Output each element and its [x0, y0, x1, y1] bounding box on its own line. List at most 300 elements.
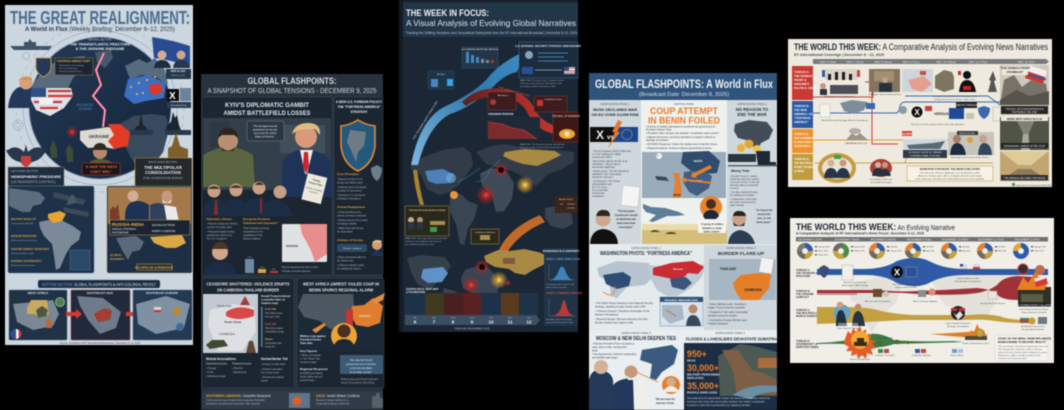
panel: Southern Lebanon and Gaza strip: GAZA: Israeli Strikes Continue	[316, 394, 360, 398]
panel: West Africa: WEST AFRICA	[28, 291, 49, 295]
box: multipolar world forum	[405, 206, 449, 236]
panel: Fortress America strategy: • Middle East and Iran are	[337, 227, 364, 230]
header panel: THE WEEK IN FOCUS:	[406, 8, 489, 19]
timeline: 6:10 AM:	[265, 307, 277, 311]
box: story of the week: narrative of a fracturing order.	[998, 357, 1027, 360]
title: THE GREAT REALIGNMENT:	[10, 8, 190, 28]
panel: Coup attempt in Benin: CENTRAL PANEL	[674, 103, 695, 106]
box: story of the week: The week began with Ukraine diplomacy and a new	[998, 345, 1048, 348]
box: multipolar world forum: THE MULTIPOLAR WORLD FORUM	[409, 209, 446, 212]
map: Donbas: BORODIN	[286, 245, 298, 248]
thread labels	[796, 268, 824, 349]
quote box: of our dear country."	[350, 371, 372, 374]
map: NIGERIA	[691, 179, 703, 183]
timeline label: US thread: THREAD B:	[794, 104, 809, 108]
panel: Musk declares war: • Elon Musk calls for the EU to be	[592, 160, 628, 163]
thread labels: THREAD A:	[796, 268, 810, 272]
markers	[878, 341, 882, 345]
donut legends: Other 10%	[1034, 250, 1044, 252]
panel: Kyiv's diplomatic gambit: Recent assessments show a slow	[282, 266, 318, 269]
text: military coup: Talon fails	[300, 341, 313, 345]
text: Zelensky's stance: as part of a peace deal.	[207, 226, 232, 229]
scene: press and diplomats	[948, 131, 994, 159]
caption	[932, 95, 978, 101]
figure: Zelensky	[203, 128, 255, 187]
timeline label: US thread: "FORTRESS	[794, 116, 811, 120]
box: story of the week: MANEUVERING TO MILITARY REALITY	[998, 340, 1046, 344]
donut: Dec 12	[1016, 246, 1026, 256]
timeline bar: DEC 9 (Tue)	[903, 60, 919, 64]
panel: Sumatra floods: 30,000+	[687, 363, 719, 373]
timeline: Thai forces attack	[265, 327, 284, 330]
icon: fighter jet	[643, 204, 685, 222]
donut legends: Asia 20%	[926, 250, 935, 252]
panel: divergence charts: fades as the coup fails.	[546, 286, 568, 289]
text: European position: European Position:	[243, 217, 271, 221]
photo: Donbas ruins: CRUMBLES"	[1006, 70, 1024, 74]
text: humanitarian toll: • Civilians evacuated	[261, 368, 283, 371]
map: Ukraine: UKRAINE	[89, 134, 109, 139]
text: military coup: remains at large	[300, 361, 317, 364]
EU flag and leaders: NEW ALLIES	[171, 70, 186, 73]
icon: explosion	[844, 326, 877, 359]
icon: Ukraine silhouette and coins	[734, 120, 773, 153]
panel: No reason to end the war: "so much money" in the war	[730, 181, 760, 184]
flow: red conflict stream	[462, 85, 566, 142]
figure: Putin and Modi	[589, 360, 646, 410]
thread labels: WORLD NARRATIVE	[796, 314, 822, 318]
panel: hemispheric pressure map: WARNED SOVEREIGNTY	[11, 259, 42, 263]
panel: Washington pivots: • Russia & Europe: Moscow welcomes the shift,	[595, 318, 648, 321]
panel: Musk declares war: of American	[592, 192, 605, 195]
timeline bar: DECEMBER 12 (FRI)	[1015, 237, 1040, 241]
timeline days: THU	[527, 318, 532, 320]
panel: Sumatra floods: Torrential rains hit catastrophic impact: the floods and landslides caused by	[687, 397, 771, 400]
panel: Border flare-up: • Heavy fighting erupts, breaking a	[708, 303, 747, 306]
panel: left section label: HEMISPHERIC PRESSURE	[11, 174, 61, 179]
timeline days	[405, 315, 540, 330]
timeline days: 6	[414, 320, 417, 326]
donut legends: Sudan 25%	[854, 250, 865, 252]
timeline label: US thread	[792, 101, 813, 128]
panel: Southern Lebanon and Gaza strip	[202, 391, 383, 409]
figure: Musk: "The European	[617, 210, 635, 213]
panel: Border flare-up: BORDER FLARE-UP	[718, 251, 765, 257]
panel: West Africa unrest: Reflects deep anti-French sentiment	[341, 378, 378, 381]
panel: Coup attempt in Benin: President Patrice Talon.	[646, 128, 673, 132]
bar chart: 8%	[272, 269, 276, 271]
panel: Sumatra floods	[684, 331, 777, 410]
flow lines	[813, 82, 1002, 163]
timeline label: multipolar thread: & INDIA	[794, 169, 804, 173]
panel: Russia-India partnership: PARTNERSHIP	[112, 232, 129, 234]
timeline label: Caribbean thread	[792, 129, 815, 153]
header: (Broadcast Date: December 8, 2025)	[639, 92, 729, 98]
icon: book	[873, 289, 882, 297]
stream: green with explosion: Gaza: Strikes	[950, 354, 964, 357]
timeline band columns: & FOUNDATION	[406, 291, 425, 294]
donut: Dec 7	[836, 246, 846, 256]
panel: Moscow and New Delhi: • Russian President Putin concludes a	[592, 342, 635, 346]
box: story of the week: STORY OF THE WEEK: FROM DIPLOMATIC	[998, 336, 1051, 340]
box: national security strategy	[515, 42, 581, 78]
panel: Coup attempt in Benin: • Nigeria Intervenes: Launches airstrikes on targets in Benin to	[646, 136, 716, 139]
panel: Moscow and New Delhi: MOSCOW & NEW DELHI DEEPEN TIES	[596, 336, 677, 342]
panel: Sumatra floods: SURROUNDING PANEL 6	[715, 332, 745, 335]
panel: hemispheric pressure map: MEDIUM PRESSURE	[11, 234, 37, 238]
box: story of the week	[995, 335, 1051, 361]
panel: Moscow and New Delhi: SURROUNDING PANEL 5	[621, 332, 651, 335]
panel: No reason to end the war	[727, 100, 777, 244]
text: Zelensky's stance: the U.S. Congress.	[207, 238, 228, 240]
timeline label: Caribbean thread: VENEZUELA	[794, 144, 811, 148]
text: analysis	[520, 79, 565, 149]
thread labels: THE TRANSATLANTIC	[796, 271, 824, 275]
text: military coup: ground troops.	[300, 379, 315, 382]
timeline bar: DECEMBER 7 (SUN)	[835, 237, 860, 241]
panel: Fortress America strategy: de-emphasized	[337, 232, 353, 234]
panel: Washington pivots: Europe rebuked and urged to shift.	[595, 322, 634, 324]
panel: hemispheric pressure map: Regional warning raised	[11, 264, 35, 267]
figure: Donald Trump Jr.: "As long as the	[756, 209, 773, 212]
donut legends: US 30%	[998, 246, 1006, 248]
map: THAILAND	[217, 304, 232, 308]
timeline label: US thread: AMERICA"	[794, 120, 809, 124]
timeline: shadow erupt.	[261, 301, 279, 305]
panel: Sumatra floods: monsoon rains have left communities isolated; the military is deployed	[687, 400, 765, 404]
stream: green with explosion: Benin Coup Attempt	[850, 358, 870, 361]
scene: Dec 6-7 meeting	[820, 69, 860, 98]
figure: Musk: Commission should	[615, 214, 638, 217]
panel: divergence charts: DIVERGENCE IN FLASHPOINTS	[543, 250, 580, 253]
timeline bar: DEC 8 (Mon)	[874, 60, 892, 64]
timeline days: 12	[526, 320, 532, 326]
icon: X vs EU	[590, 120, 638, 148]
panel: Fortress America strategy: "Europe is going to	[343, 247, 362, 250]
thread labels: THE UKRAINE	[796, 292, 814, 296]
panel: Fortress America strategy: • Blames European allies for	[337, 256, 366, 259]
stream: gold: Resigns Amid Protests	[1022, 328, 1045, 331]
text: European position: Western alliance.	[243, 238, 262, 240]
text: analysis: ANALYSIS: The Ukraine narrative turned from	[520, 143, 565, 146]
panel: right section label: CONSOLIDATION	[145, 170, 181, 175]
panel: Kyiv's diplomatic gambit	[202, 97, 332, 275]
text: Zelensky's stance: • Requests legally binding	[207, 230, 235, 234]
photo: city street	[1000, 117, 1049, 150]
donut legends: War 20%	[998, 250, 1007, 252]
landslide scene	[718, 344, 777, 399]
panel: Fortress America strategy: of strategic stability	[337, 222, 357, 226]
label box: DOMESTIC PRESSURE	[954, 105, 980, 107]
text: military coup: • Mutiny commander	[300, 354, 321, 357]
text: military coup: Lt. Col. Pascal Tigri	[300, 358, 320, 360]
box: Southeast Asia: Border Clash	[559, 199, 574, 201]
scene: naval	[902, 131, 947, 158]
panel: Sumatra floods: MILITARY PERSONNEL	[687, 372, 720, 376]
icon: X logo and label: Escalating Fines	[171, 104, 188, 107]
panel: Border flare-up	[704, 245, 777, 330]
timeline: from gun ruins.	[265, 316, 281, 318]
panel: West Africa unrest: BENIN SPARKS REGIONAL ALARM	[309, 288, 373, 292]
icon: peace plan document	[301, 173, 327, 204]
text: humanitarian toll: • Schools and markets	[261, 376, 285, 379]
panel: Washington pivots: • The White House releases a new National Security	[595, 302, 654, 305]
figure: Trump	[282, 123, 332, 197]
red event boxes: Conflicting Claims	[544, 98, 563, 101]
flow: red conflict stream: THE UKRAINE THEATRE	[498, 85, 530, 98]
text: humanitarian toll	[261, 357, 288, 382]
volcano icon: CARIBBEAN BUILDUP	[845, 142, 868, 145]
donut legends: Other 15%	[818, 254, 828, 256]
panel: Washington pivots: Western Hemisphere.	[595, 314, 619, 316]
icon: peace plan document: & territory	[309, 190, 318, 195]
panel: Kyiv's diplomatic gambit: KYIV'S DIPLOMATIC GAMBIT	[225, 102, 309, 109]
panel: Cambodia-Thailand ceasefire: ON CAMBODIA-THAILAND BORDER	[217, 288, 280, 292]
savanna strip: "A group of soldiers	[701, 223, 724, 226]
panel: Fortress America strategy: • Russia viewed in the context	[337, 219, 368, 222]
timeline label: multipolar thread: THE MULTIPOLAR	[794, 162, 815, 165]
text: Zelensky's stance	[206, 217, 238, 240]
icon: aircraft carrier	[10, 39, 52, 50]
panel: No reason to end the war: NO REASON TO	[736, 107, 769, 112]
panel: Washington pivots: • "Fortress America": Prioritizes domination of the	[595, 310, 650, 313]
quote bubble: States of America."	[255, 136, 275, 138]
box: national security strategy: U.S. NATIONAL SECURITY STRATEGY BREAKDOWN	[515, 44, 581, 48]
thread labels: THE MULTIPOLAR	[796, 311, 819, 315]
stream: green with explosion	[817, 326, 964, 361]
caption: Corruption scandal threatens Zelensky's circle;	[932, 95, 978, 98]
stream: gold: Indian Parallel Parliament	[946, 322, 971, 325]
panel: Musk declares war: ON EU OVER €120M FINE	[591, 112, 639, 117]
EU flag and leaders: Diplomatic Rifts	[171, 74, 185, 77]
text: humanitarian toll: from border areas	[261, 372, 280, 374]
box: December 10 event: Conference Moscow	[475, 231, 495, 234]
panel: Border flare-up: SURROUNDING PANEL 4	[726, 247, 756, 250]
text: military coup: deploy fighter jets and	[300, 376, 323, 378]
icon: handshake circle	[951, 306, 965, 320]
narrative synthesis box: NARRATIVE SYNTHESIS: THE WEEK'S BIG STORY	[920, 168, 981, 171]
stream: blue: calls to abolish the EU	[895, 286, 917, 289]
figure: Donald Trump Jr.: runs, no one	[757, 218, 772, 220]
flags	[878, 349, 883, 353]
timeline label: Caribbean thread: THREAD C:	[794, 132, 809, 136]
timeline label: Donbas thread	[792, 66, 817, 100]
arrow	[126, 309, 141, 319]
panel: Coup attempt in Benin: dislodge the plotters.	[646, 139, 669, 142]
panel: Fortress America strategy: Core Principles	[337, 172, 359, 176]
stream: blue	[817, 258, 1048, 289]
stream: green with explosion: Lebanon: Ceasefire	[875, 354, 895, 357]
timeline band columns	[405, 288, 538, 316]
source tag: International Comparative Media Analysis	[1016, 184, 1057, 187]
panel: Russia-India partnership: MAJORITY	[110, 257, 125, 261]
timeline days: TIMELINE (DECEMBER 2025)	[454, 326, 490, 330]
timeline label: Caribbean thread: THE CARIBBEAN	[794, 137, 815, 140]
panel: Sumatra floods: DEAD	[687, 358, 696, 362]
thread labels: THREAD D:	[796, 339, 810, 343]
map: CAMBODIA	[219, 332, 235, 336]
panel: hemispheric pressure map: SEIZURE ENERGY RESOURCE	[11, 247, 50, 251]
figure: Zelensky quote: CAN'T WIN."	[90, 170, 112, 174]
figure: Musk: states back their	[617, 222, 636, 225]
icon: document	[621, 185, 640, 207]
photo: metro corridor: "THE KREMLIN SECURED THE PEACE"	[1003, 177, 1046, 180]
panel: Fortress America strategy: Global Realignment	[337, 205, 365, 209]
icon: power tower	[988, 71, 997, 92]
panel: Russia-India partnership: $100 BILLION TRADE	[152, 224, 175, 227]
timeline label: Donbas thread: THE DONBAS	[794, 74, 813, 78]
poster: The Week in Focus: framed a new multipolar alternative to	[405, 240, 442, 243]
map: Donbas	[282, 224, 327, 262]
footer text: Source: Synthesis of RT International Broadcasts, December 6–12, 2025	[60, 342, 141, 345]
map: world top	[411, 144, 574, 245]
bar chart	[245, 257, 278, 273]
map	[642, 151, 726, 198]
panel: right section label: (THE ALTERNATIVE RISING)	[143, 176, 183, 180]
figure: Macron	[205, 242, 237, 275]
panel: Washington pivots	[589, 245, 707, 330]
thread labels: SOVEREIGNTY &	[796, 342, 817, 346]
icon: document	[842, 265, 853, 280]
panel: Musk declares war: democratic legitimacy.	[592, 166, 616, 169]
central globe	[26, 37, 171, 179]
panel: hemispheric pressure map: Seizing oil tanker cargo	[11, 252, 35, 255]
figure: Donald Trump Jr.: money train	[757, 213, 771, 216]
panel: Musk declares war: • The EU imposes a $120 million fine	[592, 150, 632, 153]
icon: X vs EU: X	[596, 128, 604, 142]
panel: No reason to end the war: graft scandal.	[730, 204, 745, 207]
timeline label: Donbas thread: FRONT &	[794, 78, 806, 82]
stream: blue: from Europe to hemisphere	[955, 280, 982, 283]
subtitle: A SNAPSHOT OF GLOBAL TENSIONS - DECEMBER 9, 2025	[208, 88, 377, 95]
panel: Sumatra floods: DEPLOYED	[687, 376, 704, 380]
panel: No reason to end the war: Ukrainian elites are making	[730, 178, 760, 181]
timeline days: 8	[452, 320, 455, 326]
lightning	[93, 53, 105, 127]
panel: Musk declares war: SURROUNDING PANEL 1	[600, 103, 630, 106]
panel: Washington pivots: SURROUNDING PANEL 3	[631, 247, 661, 250]
section title: THE TRANSATLANTIC FRACTURE	[70, 42, 131, 46]
stream: red: Moscow talks & lawmakers	[865, 300, 892, 303]
timeline: Donald Trump brokered	[261, 294, 291, 298]
map: BENIN	[673, 194, 681, 197]
header panel	[403, 3, 578, 37]
X versus EU	[899, 106, 1003, 126]
stream: green with explosion: Cambodia: Fighting	[912, 354, 931, 357]
panel: Musk declares war: services act (DSA).	[592, 156, 613, 159]
red event boxes: Attacking a	[498, 94, 509, 97]
figure: Musk: be abolished and	[616, 218, 636, 221]
timeline bar: DECEMBER 8 (MON)	[870, 237, 896, 241]
scene: document and world map	[820, 100, 875, 122]
panel: Moscow and New Delhi: and $100B trade target.	[592, 356, 619, 360]
panel: No reason to end the war: that they have no incentive	[730, 184, 759, 187]
box: December 10 event	[471, 229, 499, 244]
map: US flag	[31, 88, 73, 116]
text: military coup: Regional Response	[300, 367, 328, 371]
quote bubble: come from the United	[254, 132, 277, 135]
panel: Moscow and New Delhi: state visit to India, meeting with	[592, 346, 627, 349]
section title: CENTRAL SECTION:	[88, 38, 112, 42]
silhouettes: capitals	[130, 112, 191, 135]
map	[640, 345, 678, 380]
icon: peace plan document: Trump	[312, 177, 321, 183]
portrait: interests of both	[656, 402, 675, 405]
panel: Moscow and New Delhi	[589, 331, 684, 410]
panel: No reason to end the war: • Donald Trump Jr. claims	[730, 175, 758, 178]
panel: No reason to end the war: Money Train	[731, 169, 750, 173]
panel: Coup attempt in Benin	[641, 100, 727, 244]
panel: Musk declares war: the U.S. decry	[592, 186, 608, 189]
map: world bottom	[407, 249, 548, 322]
flow: orange African stream	[497, 215, 545, 258]
panel: Fortress America strategy: crusades for democracy	[337, 190, 362, 192]
quote bubble	[247, 121, 284, 141]
photo: Donbas ruins: "THE FALL OF KONSTANTINIVKA IS	[1005, 108, 1044, 111]
stream: blue: The Transfer Dispute: Musk	[893, 283, 920, 286]
timeline: tempo fire.	[265, 346, 276, 348]
panel: Musk declares war: abolished" and "sovereignty	[592, 173, 622, 176]
donut: Dec 10	[944, 246, 954, 256]
poster: The World This Week evolving	[790, 218, 1054, 363]
panel: Musk declares war: the censorship	[592, 189, 608, 192]
timeline: Cambodian troops.	[265, 330, 285, 334]
donut: Dec 9	[908, 246, 918, 256]
section heading: bottom	[38, 280, 160, 288]
panel: Musk declares war: on X for violating the digital	[592, 153, 621, 156]
label box	[954, 102, 980, 108]
bar chart: 72%	[247, 257, 252, 259]
icon: shield with box: • Pressuring Europe	[58, 67, 78, 70]
timeline label: Donbas thread: POLITICAL CRISIS	[794, 87, 817, 90]
timeline days: SAT	[432, 316, 437, 320]
quote bubble: "The strongest security	[253, 125, 278, 128]
panel: Southeast Europe	[133, 290, 192, 340]
panel: West Africa	[9, 290, 67, 340]
stream: gold: Putin "Summit" Signals	[837, 327, 860, 330]
donut legends: Ukraine 25%	[890, 250, 902, 252]
figures: Putin Modi	[834, 302, 865, 326]
quote box: government not to interfere	[346, 363, 377, 366]
icon: calendar	[988, 291, 997, 299]
figures: European leaders	[203, 182, 293, 216]
area chart: Ukrainian position: UKRAINIAN POSITION	[488, 113, 514, 116]
timeline: Cambodian side	[265, 343, 282, 345]
red event boxes	[488, 92, 580, 142]
donut legends: Benin 30%	[818, 250, 828, 252]
quote box: in the internal affairs	[350, 367, 373, 370]
panel: Kyiv's diplomatic gambit: AMIDST BATTLEFIELD LOSSES	[224, 110, 311, 117]
portrait	[700, 196, 722, 219]
icon: shield with box	[36, 58, 93, 77]
icon: X vs EU: vs	[607, 135, 614, 141]
poster: Global Flashpoints snapshot	[201, 74, 385, 410]
box: Southeast Asia	[555, 196, 578, 213]
panel: Russia-India partnership: RUSSIA-INDIA	[112, 222, 145, 227]
text: European position: marginalized in the	[243, 230, 264, 234]
panel: Border flare-up: • Thailand's F-16s strike Cambodian	[708, 311, 749, 314]
scene: Dec 8 office	[868, 69, 902, 96]
scene: Putin Modi medallion	[818, 153, 856, 183]
red event boxes: THE WALL OF BURDENS	[552, 115, 580, 118]
timeline days: SUN	[451, 318, 456, 320]
panel: Russia-India partnership: SPECIAL STRATEGIC	[112, 228, 136, 231]
scene: press and diplomats: Washington and Caracas trade rhetoric;	[951, 156, 990, 159]
panel: right section label: RIGHT-HAND SECTION:	[148, 160, 178, 164]
timeline: 8:00 AM:	[265, 322, 277, 326]
text: military coup: President Patrice	[300, 338, 322, 342]
text: European position: Sidelined and Impotent?	[243, 221, 278, 225]
